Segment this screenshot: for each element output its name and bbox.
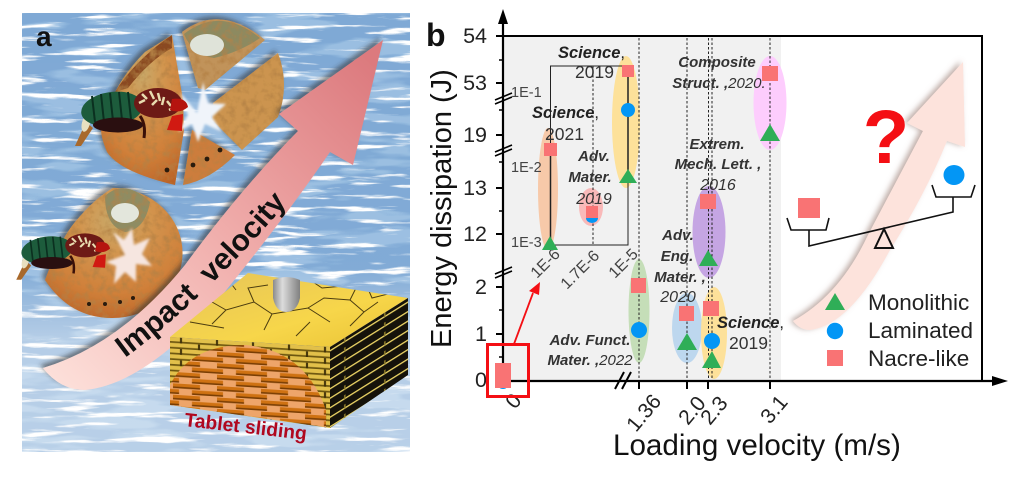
y axis arrow [498, 9, 508, 24]
icon: impact flash on fractured shell [178, 82, 226, 142]
journal annotations [532, 44, 784, 369]
arrow label: Impact velocity [114, 192, 286, 357]
tablet sliding zone [170, 345, 326, 427]
journal annotations: Mater. [568, 169, 612, 186]
indenter [273, 277, 300, 312]
legend: Nacre-like [868, 346, 969, 371]
icon: nacre brick-and-mortar block [170, 273, 408, 428]
origin zoom box and callout arrow [488, 282, 540, 396]
inset frame [550, 66, 628, 245]
laminated markers [586, 103, 720, 349]
panel letter b: b [426, 17, 446, 53]
dotted velocity guide lines [593, 38, 770, 381]
y axis labels: 54 [463, 24, 487, 48]
journal annotations: Adv. Funct. [549, 332, 630, 349]
block side face [330, 298, 408, 428]
journal annotations: Composite [678, 54, 756, 71]
panel a: impact velocity illustration [16, 13, 410, 452]
legend: Laminated [868, 318, 973, 343]
inset x labels: 1E-6 [528, 246, 564, 282]
big faded arrow with question [793, 62, 965, 330]
x axis title: Loading velocity (m/s) [613, 429, 901, 462]
journal annotations: 2020 [659, 289, 696, 306]
inset y labels [511, 85, 542, 251]
y axis labels: 12 [463, 222, 487, 246]
arrow: impact velocity [43, 40, 383, 390]
journal annotations: Mech. Lett. , [675, 156, 761, 173]
block top surface [170, 273, 408, 347]
x axis labels [501, 389, 793, 436]
journal annotations: 2016 [699, 177, 736, 194]
x axis labels: 1.36 [622, 390, 666, 436]
legend: Monolithic [868, 290, 969, 315]
y axis labels: 19 [463, 123, 487, 147]
journal annotations: Science, [717, 314, 784, 332]
block front face [170, 337, 330, 428]
y axis labels: 0 [475, 368, 487, 392]
journal annotations: 2019 [575, 62, 614, 82]
icon: mantis shrimp striking intact shell [16, 233, 110, 280]
monolithic markers [542, 124, 780, 368]
panel a background: ice texture [22, 13, 410, 452]
panel letter a: a [36, 21, 52, 52]
y axis labels: 2 [475, 275, 487, 299]
y axis labels [463, 24, 487, 392]
chart: energy dissipation versus loading velocity [426, 9, 1008, 462]
plot shaded region [503, 37, 781, 381]
x axis labels: 3.1 [756, 391, 793, 428]
y axis title: Energy dissipation (J) [426, 69, 458, 348]
icon: balance scale [787, 165, 975, 248]
journal annotations: Adv. [577, 148, 610, 165]
journal annotations: Extrem. [689, 136, 745, 153]
icon: fractured abalone shell [101, 19, 284, 185]
axes frame [496, 16, 1000, 389]
icon: intact abalone shell [45, 188, 183, 318]
x axis arrow [992, 376, 1008, 386]
inset x labels: 1E-5 [606, 246, 642, 282]
journal annotations: 2021 [545, 124, 584, 144]
inset y labels: 1E-2 [511, 160, 542, 176]
question mark: ? [863, 95, 909, 180]
x axis break mark [615, 372, 631, 389]
journal annotations: 2019 [575, 191, 612, 208]
journal annotations: Mater. , [654, 269, 706, 286]
x axis labels: 2.3 [696, 392, 733, 429]
y axis labels: 1 [475, 322, 487, 346]
nacre-like markers [544, 65, 778, 321]
block top cracks [190, 283, 388, 336]
inset y labels: 1E-1 [511, 85, 542, 101]
legend [825, 290, 973, 371]
y axis labels: 53 [463, 71, 487, 95]
icon: impact flash on intact shell [106, 228, 152, 284]
journal annotations: Mater. ,2022 [547, 352, 633, 369]
y axis break marks [495, 93, 512, 278]
journal annotations: 2019 [729, 333, 768, 353]
inset x labels [528, 246, 642, 293]
x axis labels: 2.0 [674, 392, 711, 429]
icon: mantis shrimp striking fractured shell [75, 88, 188, 146]
journal annotations: Struct. ,2020. [672, 75, 766, 92]
journal annotations: Eng. [661, 248, 693, 265]
journal annotations: Science, [532, 104, 599, 122]
journal annotations: Adv. [661, 227, 694, 244]
y axis labels: 13 [463, 176, 487, 200]
x axis labels: 0 [501, 389, 526, 413]
label: tablet sliding: Tablet sliding [183, 410, 308, 445]
journal annotations: Science, [558, 44, 625, 62]
inset y labels: 1E-3 [511, 235, 542, 251]
data group ellipses [538, 56, 786, 379]
inset x labels: 1.7E-6 [558, 247, 603, 293]
